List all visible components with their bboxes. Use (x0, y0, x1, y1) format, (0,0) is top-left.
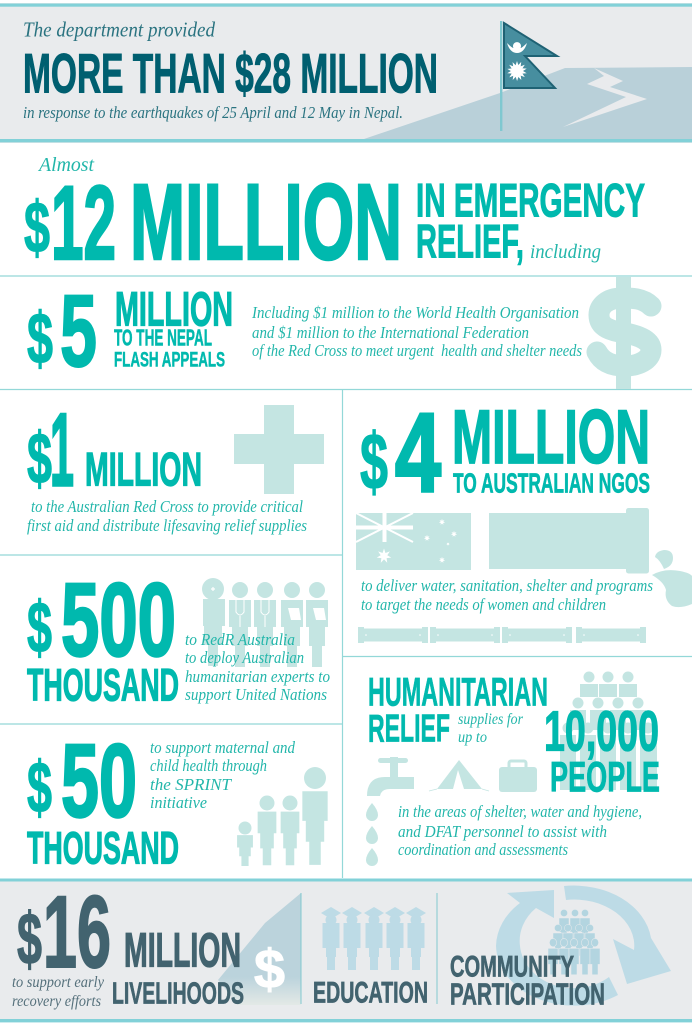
text: relief description (398, 802, 642, 859)
text: supplies for up to (458, 711, 524, 746)
text: including: including (530, 241, 601, 263)
icon: cross (234, 405, 324, 494)
number: 500 thousand: $ (27, 588, 52, 668)
text: NGO description: to deliver water, sanitation, shelter and programs (361, 576, 653, 595)
text: red cross description: first aid and distribute lifesaving relief supplies (27, 516, 307, 535)
heading: humanitarian relief: HUMANITARIAN (368, 671, 548, 715)
number: 16 million: MILLION (124, 924, 241, 977)
icon: tent (429, 760, 489, 791)
number: 16 million: 16 (43, 875, 111, 989)
icon: mountain and dollar: $ (254, 938, 285, 1000)
section lines (0, 276, 692, 878)
number: 500 thousand: 500 (61, 562, 176, 678)
text: RedR description: humanitarian experts to (185, 667, 330, 686)
icon: family (237, 767, 328, 866)
number: 500 thousand: THOUSAND (27, 659, 179, 710)
number: 500 thousand (27, 562, 179, 710)
text: SPRINT description: initiative (150, 793, 207, 812)
number: 50 thousand: THOUSAND (27, 822, 179, 873)
heading: humanitarian relief (368, 671, 548, 751)
number: 50 thousand: $ (27, 748, 52, 828)
number: 12 million: $ (24, 188, 50, 268)
heading: in emergency relief (416, 174, 645, 268)
text: flash appeals description: Including $1 million to the World Health Organisation (251, 303, 579, 322)
icon: experts group (202, 578, 328, 667)
icon: Nepal flag (500, 21, 557, 131)
text: relief description: coordination and assessments (398, 840, 568, 859)
text: red cross description (27, 497, 307, 535)
panel: footer band (0, 875, 692, 1022)
text: earthquakes note: in response to the earthquakes of 25 April and 12 May in Nepal. (23, 103, 403, 122)
number: 12 million: MILLION (130, 161, 402, 282)
text: almost: Almost (37, 154, 94, 176)
number: 16 million: $ (17, 899, 42, 980)
number: 1 million: $ (27, 419, 52, 499)
panel: 4 million Australian NGOs (356, 390, 692, 643)
number: 5 million: TO THE NEPAL (114, 325, 212, 351)
heading: education: EDUCATION (313, 977, 428, 1010)
icon: water pipe with drops (489, 508, 692, 607)
number: 4 million (360, 390, 650, 516)
icon: circular arrows with crowd (496, 886, 671, 1006)
text: early recovery: recovery efforts (12, 993, 101, 1010)
heading: community participation (450, 951, 605, 1012)
text: relief description: and DFAT personnel to assist with (398, 822, 607, 841)
text: RedR description: support United Nations (185, 685, 327, 704)
heading: community participation: COMMUNITY (450, 951, 574, 984)
number: 10,000 people (544, 699, 660, 802)
heading: in emergency relief: RELIEF, (416, 214, 524, 268)
panel: header band (0, 3, 692, 143)
panel: 5 million flash appeals (27, 274, 651, 389)
text: flash appeals description: and $1 million to the International Federation (252, 323, 529, 342)
panel: 500 thousand (27, 562, 330, 710)
number: 12 million: 12 (51, 165, 116, 282)
text: NGO description: to target the needs of women and children (361, 595, 606, 614)
text: relief description: in the areas of shelter, water and hygiene, (398, 802, 642, 821)
icon: briefcase (499, 761, 537, 792)
text: NGO description (361, 576, 653, 614)
number: 4 million: $ (360, 417, 388, 506)
panel: 50 thousand (27, 724, 328, 873)
icon: graduates (321, 907, 426, 970)
text: supplies for up to: up to (458, 729, 487, 746)
icon: mountain (364, 67, 692, 139)
text: RedR description: to deploy Australian (185, 648, 304, 667)
text: flash appeals description (251, 303, 582, 360)
number: 1 million (27, 392, 202, 508)
text: early recovery: to support early (12, 974, 105, 991)
heading: intro line: The department provided (23, 18, 215, 42)
number: 1 million: MILLION (85, 442, 202, 495)
text: supplies for up to: supplies for (458, 711, 524, 728)
number: 50 thousand (27, 724, 179, 873)
number: 5 million: $ (27, 299, 53, 379)
icon: mountain and dollar (218, 893, 302, 1005)
number: 5 million: 5 (60, 274, 97, 388)
number: 5 million: FLASH APPEALS (114, 348, 225, 372)
text: RedR description: to RedR Australia (185, 630, 295, 649)
text: SPRINT description: to support maternal and (150, 738, 295, 757)
text: early recovery (12, 974, 105, 1010)
text: red cross description: to the Australian Red Cross to provide critical (31, 497, 303, 516)
text: flash appeals description: of the Red Cross to meet urgent health and shelter needs (252, 341, 582, 360)
number: 12 million (24, 161, 402, 282)
text: RedR description (185, 630, 330, 704)
panel: humanitarian relief (366, 671, 660, 866)
icon: crowd (560, 672, 657, 790)
text: SPRINT description: the SPRINT (150, 775, 233, 794)
icon: Australian flag (356, 513, 471, 570)
icon: large dollar (597, 277, 651, 389)
icon: pipe segments (358, 627, 646, 643)
heading: community participation: PARTICIPATION (450, 977, 605, 1012)
heading: more than 28 million: MORE THAN $28 MILLION (23, 42, 438, 104)
number: 5 million (27, 274, 233, 388)
panel: emergency relief headline (24, 154, 645, 282)
text: SPRINT description: child health through (150, 756, 267, 775)
number: 1 million: 1 (50, 392, 74, 508)
heading: humanitarian relief: RELIEF (368, 708, 450, 751)
heading: livelihoods: LIVELIHOODS (112, 976, 244, 1011)
number: 16 million (17, 875, 241, 989)
panel: 1 million red cross (27, 392, 324, 535)
number: 5 million: MILLION (115, 283, 233, 336)
icon: tap (366, 757, 414, 866)
text: SPRINT description (150, 738, 295, 812)
number: 4 million: 4 (395, 390, 441, 516)
number: 50 thousand: 50 (61, 724, 137, 840)
